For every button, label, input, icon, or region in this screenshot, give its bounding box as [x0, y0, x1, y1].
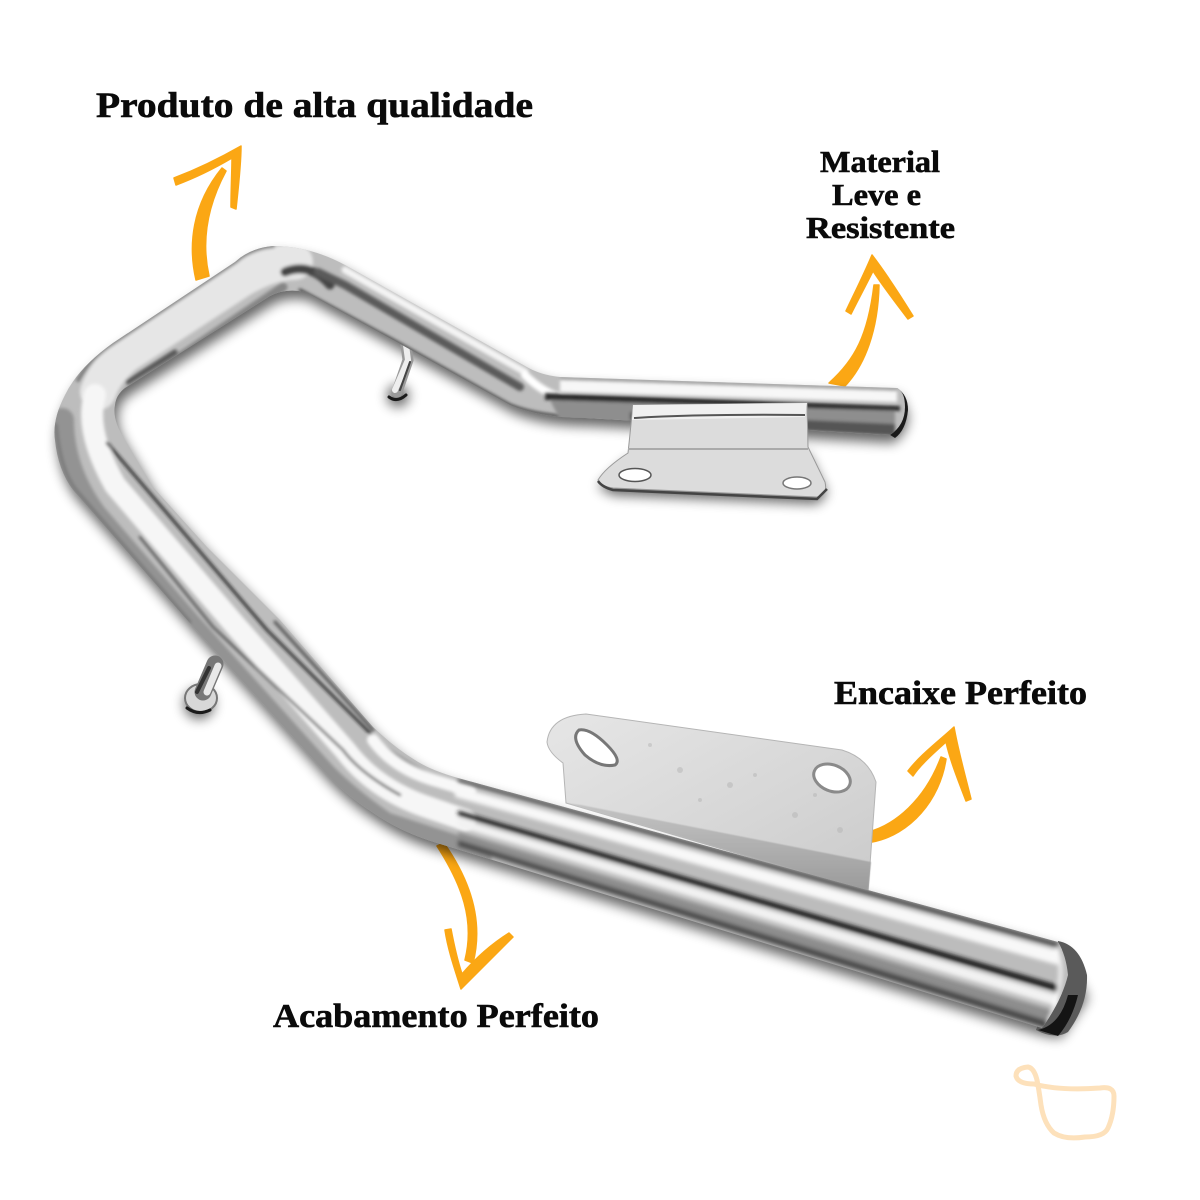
lower straight segment — [455, 778, 1060, 1032]
long diagonal lines — [107, 443, 425, 772]
icon: arrow to top-left bend — [174, 146, 241, 280]
upper mounting plate — [598, 403, 827, 499]
icon: arrow down from lower tube — [437, 843, 513, 989]
upper straight segment — [545, 377, 900, 436]
label: Acabamento Perfeito: Acabamento Perfeito — [273, 998, 599, 1035]
product photo: chrome motorcycle bar — [48, 245, 1095, 1046]
chrome tube — [54, 246, 1068, 1028]
top left segment — [98, 262, 295, 392]
logo: cream bag outline — [1016, 1067, 1114, 1138]
upper diagonal — [345, 270, 525, 372]
rubber end cap — [1036, 941, 1087, 1036]
drop shadow — [57, 254, 1088, 1038]
upper end cap — [882, 388, 908, 438]
label: Encaixe Perfeito: Encaixe Perfeito — [834, 675, 1087, 712]
label: Material Leve e Resistente: Material — [820, 144, 940, 179]
lower mounting plate — [547, 714, 876, 892]
label: Material Leve e Resistente — [806, 144, 955, 245]
label: Material Leve e Resistente: Leve e — [832, 177, 921, 212]
icon: arrow from lower plate — [868, 727, 971, 842]
stud: lower — [185, 664, 218, 713]
icon: arrow to upper tube end — [829, 255, 913, 386]
label: Material Leve e Resistente: Resistente — [806, 210, 955, 245]
stud: upper — [389, 345, 410, 400]
title: Produto de alta qualidade: Produto de alta qualidade — [96, 85, 533, 125]
white band — [92, 395, 465, 820]
left outer band — [62, 420, 480, 855]
